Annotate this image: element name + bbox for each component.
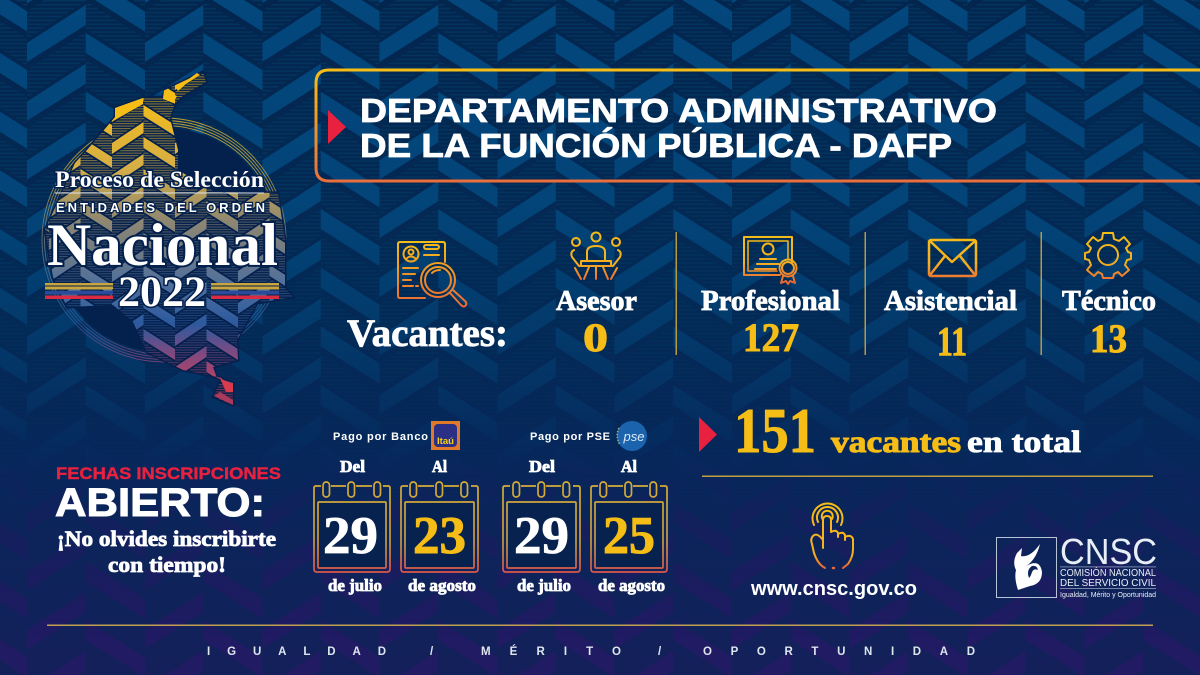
footer: motto: IGUALDAD	[207, 646, 386, 658]
label: Fechas inscripciones: FECHAS INSCRIPCIONES	[56, 465, 281, 483]
heading: Vacantes: Vacantes:	[347, 312, 508, 355]
calendar: al 23 de agosto: Al	[432, 457, 447, 476]
logo full name: Igualdad, Mérito y Oportunidad	[1060, 592, 1156, 599]
footer: motto	[207, 645, 975, 658]
logo emblem	[996, 538, 1056, 598]
label: Técnico: Técnico	[1062, 286, 1156, 317]
footer: motto: MÉRITO	[481, 645, 621, 658]
panel: entity title	[316, 70, 1200, 181]
reminder text	[57, 526, 276, 577]
calendar: al 25 de agosto: 25	[603, 507, 655, 565]
callout: total vacantes	[699, 395, 1081, 466]
text: vacantes: vacantes	[831, 424, 961, 459]
panel: Técnico	[1062, 233, 1156, 361]
panel: Profesional	[701, 237, 840, 360]
callout: inscription status	[55, 465, 281, 577]
label: Profesional: Profesional	[701, 286, 840, 317]
footer: motto: /	[430, 646, 434, 658]
icon: Itaú logo	[431, 421, 460, 450]
calendar: del 29 de julio	[503, 457, 580, 595]
logo heading: Proceso de Selección: Proceso de Selección	[55, 167, 264, 192]
calendar: al 23 de agosto: 23	[413, 507, 466, 565]
icon: Itaú logo: Itaú	[437, 436, 454, 447]
logo full name	[1060, 566, 1156, 599]
calendar: del 29 de julio: 29	[323, 507, 378, 565]
footer: motto: /	[658, 646, 662, 658]
status: Abierto: ABIERTO:	[55, 481, 265, 525]
logo year: 2022: 2022	[118, 269, 206, 316]
logo word: Nacional: Nacional	[47, 212, 278, 278]
panel: Asesor	[556, 232, 637, 360]
label: Pago por Banco: Pago por Banco	[333, 431, 428, 443]
calendar: al 25 de agosto: Al	[621, 457, 637, 476]
footer: motto: OPORTUNIDAD	[703, 646, 975, 658]
icon: meeting group	[571, 232, 621, 279]
value: 0: 0	[583, 315, 608, 360]
text: en total: en total	[967, 424, 1081, 459]
label: Asesor: Asesor	[556, 286, 637, 317]
icon: envelope	[929, 240, 976, 276]
reminder text: ¡No olvides inscribirte	[57, 526, 276, 551]
arrow: total marker	[699, 417, 717, 452]
panel: Asistencial	[884, 240, 1017, 364]
calendar: al 23 de agosto: de agosto	[408, 576, 476, 595]
reminder text: con tiempo!	[108, 552, 226, 577]
value: 127: 127	[743, 315, 799, 360]
calendar: del 29 de julio: Del	[529, 457, 555, 476]
calendar: al 23 de agosto	[401, 457, 478, 595]
value: 11: 11	[937, 318, 967, 364]
map of Colombia with circle badge	[42, 70, 296, 407]
icon: certificate	[744, 237, 796, 284]
calendar: al 25 de agosto	[591, 457, 667, 595]
icon: PSE logo: pse	[623, 429, 644, 444]
label: Pago por PSE: Pago por PSE	[530, 431, 610, 443]
icon: PSE logo	[617, 421, 647, 451]
title line 2: DE LA FUNCIÓN PÚBLICA - DAFP	[360, 127, 952, 165]
number: 151: 151	[734, 395, 816, 466]
icon: document with magnifier	[398, 242, 466, 306]
title line 1: DEPARTAMENTO ADMINISTRATIVO	[360, 93, 997, 130]
logo: CNSC	[996, 531, 1157, 599]
calendar: del 29 de julio	[314, 457, 390, 595]
panel: pago por banco	[314, 421, 478, 595]
label: Asistencial: Asistencial	[884, 286, 1017, 317]
calendar: al 25 de agosto: de agosto	[598, 576, 665, 595]
calendar: del 29 de julio: de julio	[328, 576, 382, 595]
value: 13: 13	[1090, 316, 1127, 361]
calendar: del 29 de julio: 29	[514, 507, 569, 565]
logo full name: DEL SERVICIO CIVIL	[1060, 578, 1156, 589]
calendar: del 29 de julio: Del	[340, 457, 365, 476]
logo name: CNSC	[1060, 531, 1157, 572]
panel: pago por PSE	[503, 421, 667, 595]
calendar: del 29 de julio: de julio	[517, 576, 571, 595]
logo flag stripes	[45, 283, 279, 299]
link: website: www.cnsc.gov.co	[750, 578, 917, 600]
icon: hand tap	[811, 503, 853, 568]
logo full name: COMISIÓN NACIONAL	[1060, 566, 1156, 579]
logo subheading: Entidades del Orden: ENTIDADES DEL ORDEN	[56, 200, 265, 215]
icon: gear	[1085, 233, 1131, 278]
arrow: title marker	[328, 110, 346, 144]
logo: Proceso de Selección Nacional 2022	[42, 70, 296, 407]
